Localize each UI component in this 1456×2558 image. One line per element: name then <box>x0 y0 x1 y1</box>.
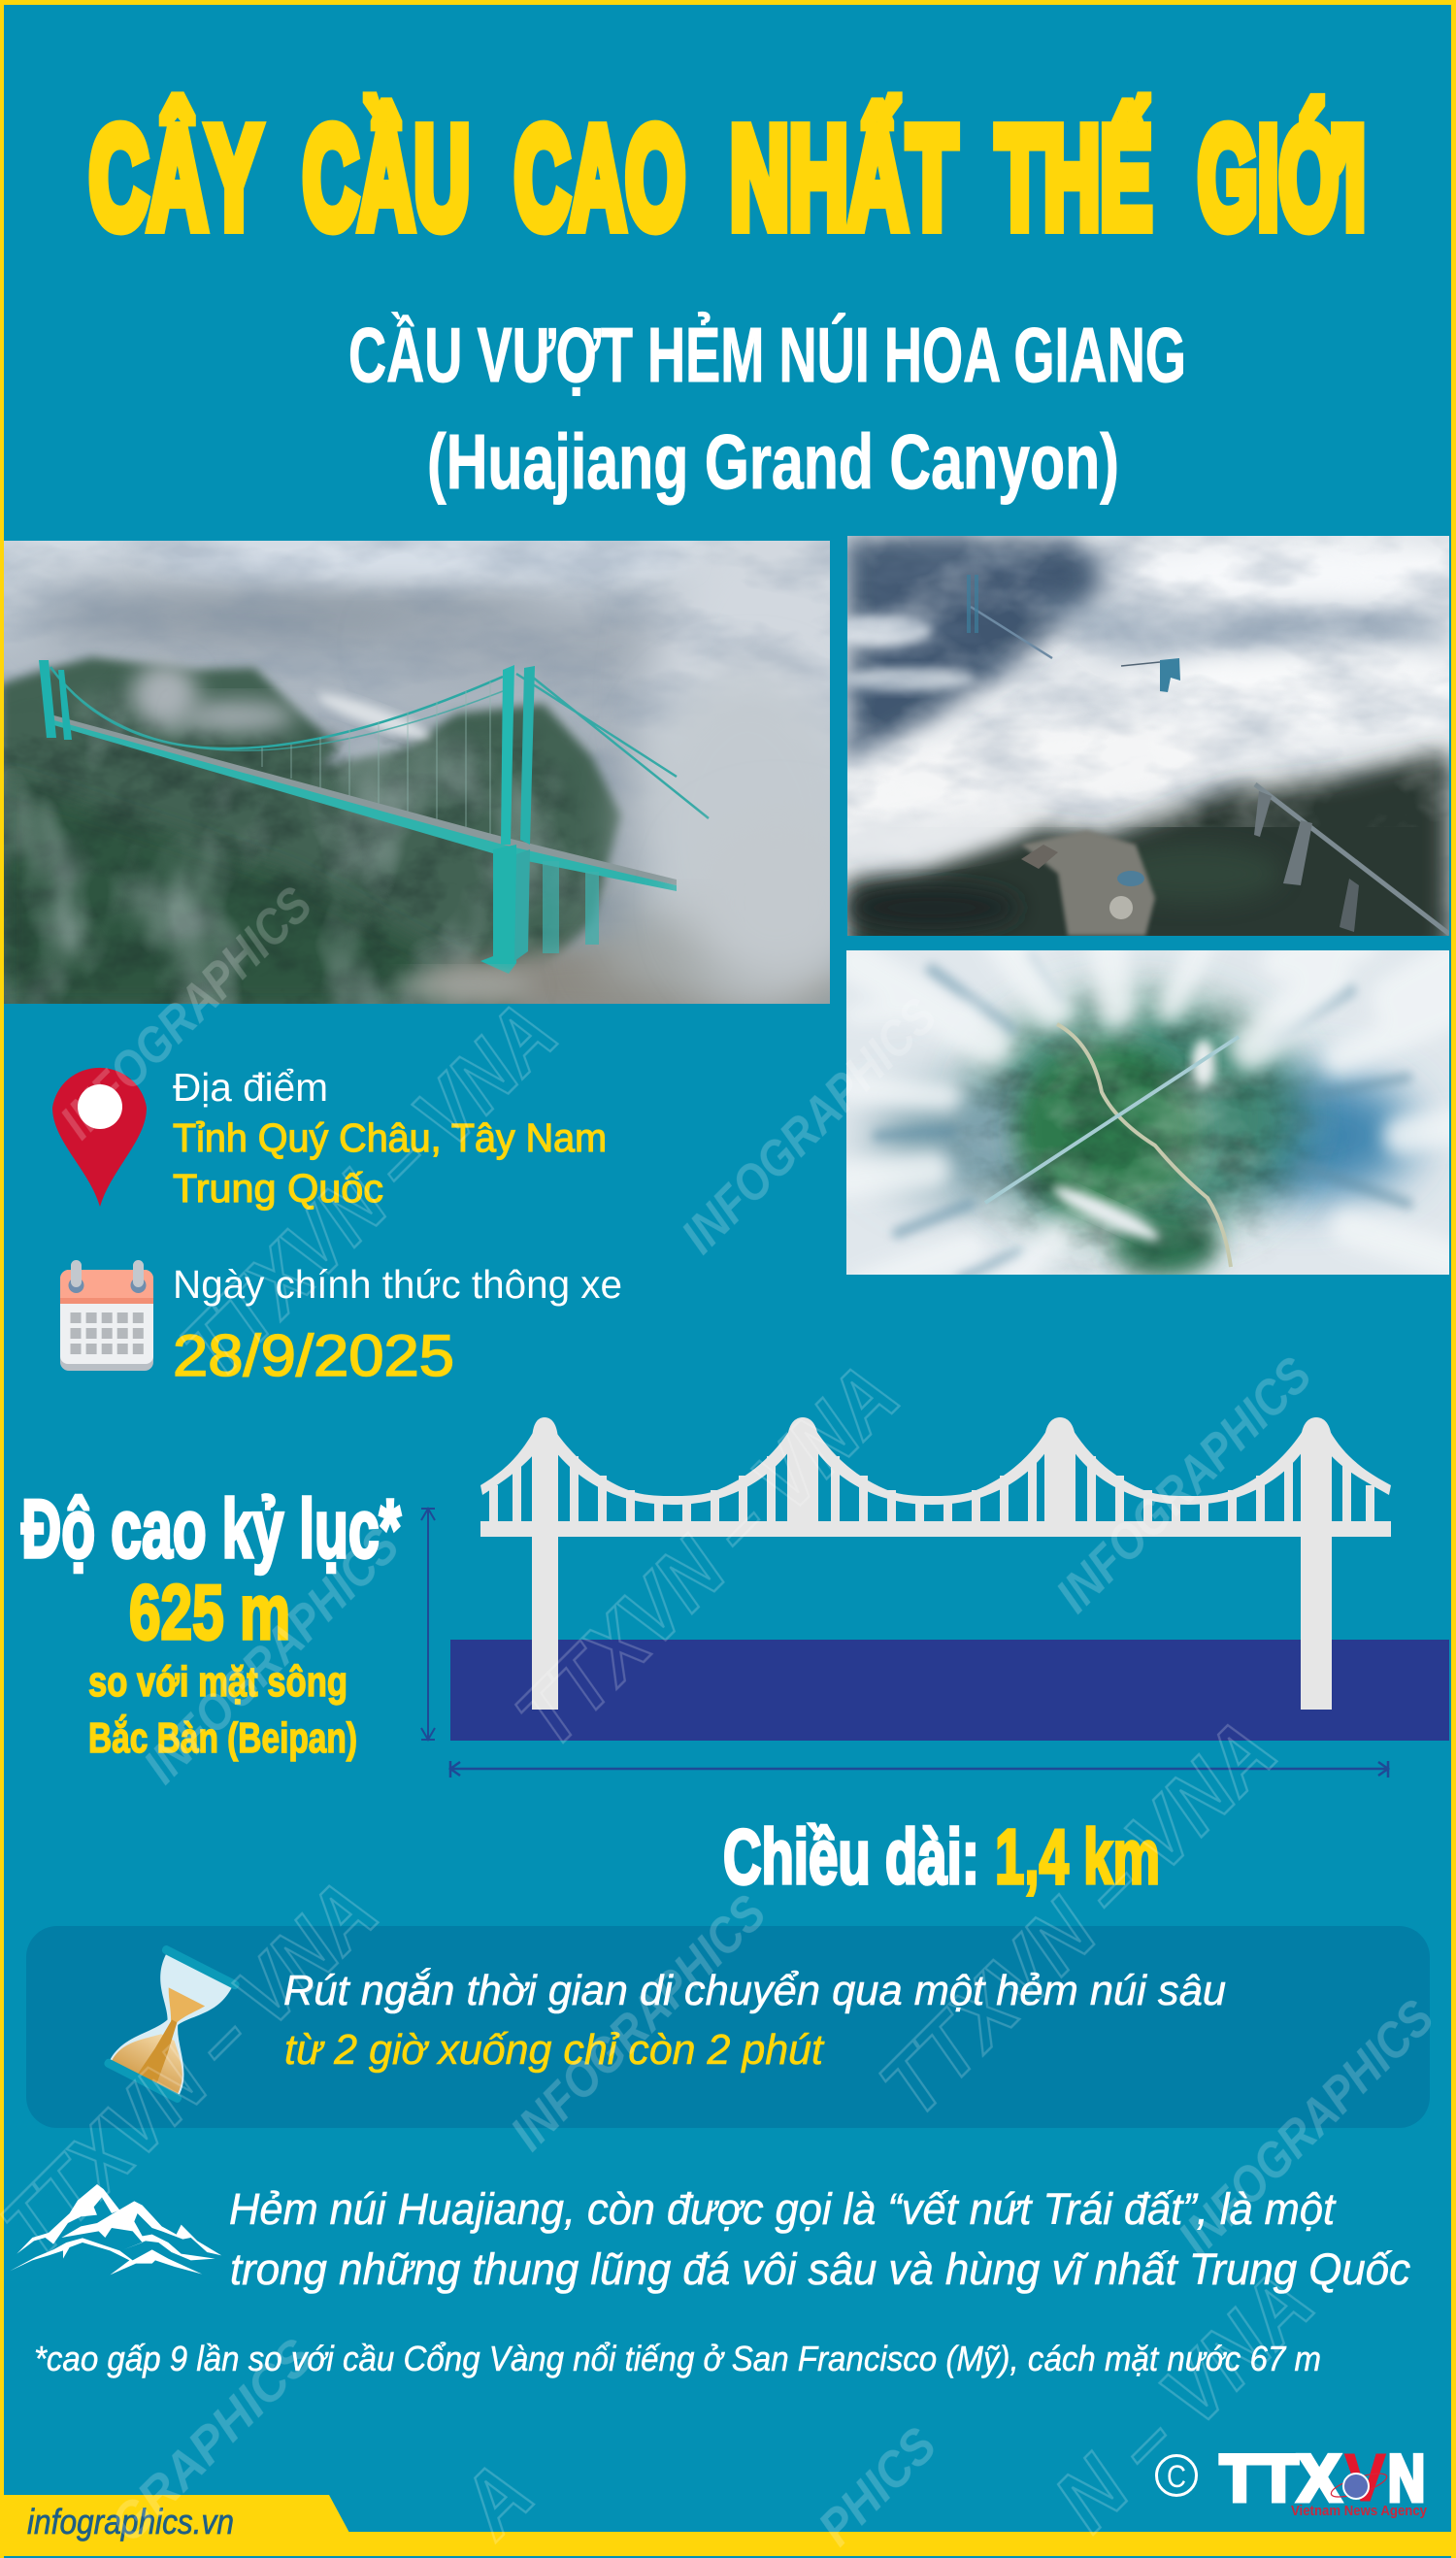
icon: mountains <box>10 2184 221 2275</box>
record height label: Độ cao kỷ lục* <box>21 1483 401 1576</box>
panel text: từ 2 giờ xuống chỉ còn 2 phút <box>284 2026 825 2074</box>
photo: sea of clouds with tower <box>847 536 1449 936</box>
logo: TTXVN: V <box>1344 2440 1386 2515</box>
icon: location pin <box>52 1068 147 1207</box>
panel: travel time <box>26 1926 1430 2128</box>
watermarks: A <box>441 2445 552 2556</box>
arrow: height <box>421 1509 435 1740</box>
description text <box>229 2184 1410 2294</box>
hangers <box>489 1456 1374 1524</box>
watermarks: N – VNA <box>1037 2254 1332 2549</box>
watermarks: TTXVN – VNA <box>163 985 576 1397</box>
length label: 1,4 km <box>995 1813 1160 1900</box>
watermarks: INFOGRAPHICS <box>133 1517 411 1794</box>
description text: Hẻm núi Huajiang, còn được gọi là “vết nứt Trái đất”, là một <box>229 2184 1337 2234</box>
location text: Địa điểm <box>173 1065 328 1110</box>
panel text: Rút ngắn thời gian di chuyển qua một hẻm núi sâu <box>283 1967 1226 2014</box>
title: CẦU <box>303 98 470 258</box>
theme park <box>1021 830 1155 936</box>
watermarks: INFOGRAPHICS <box>500 1884 778 2161</box>
footer tab <box>0 2495 349 2533</box>
towers <box>532 1417 558 1710</box>
cables <box>480 1431 1391 1505</box>
bridge in photo <box>39 660 709 974</box>
watermarks: TTXVN – VNA <box>498 1347 917 1766</box>
title <box>89 97 1366 258</box>
record height label: so với mặt sông <box>88 1658 347 1706</box>
arrow: length <box>450 1761 1388 1777</box>
far tower and viaduct <box>967 575 1449 934</box>
title: THẾ <box>996 97 1152 258</box>
logo: TTXVN: Vietnam News Agency <box>1291 2504 1427 2519</box>
title: CAO <box>514 98 685 258</box>
bridge diagram <box>480 1417 1391 1710</box>
deck <box>480 1521 1391 1537</box>
icon: calendar <box>60 1260 153 1371</box>
record height label: 625 m <box>129 1569 290 1655</box>
watermarks: INFOGRAPHICS <box>671 987 948 1264</box>
panel text <box>283 1967 1226 2074</box>
title: CÂY <box>89 98 261 258</box>
description text: trong những thung lũng đá vôi sâu và hùng vĩ nhất Trung Quốc <box>230 2244 1410 2294</box>
opening date text: 28/9/2025 <box>173 1323 454 1388</box>
watermarks: INFOGRAPHICS <box>50 877 323 1149</box>
record height label <box>21 1483 401 1762</box>
bridge line <box>985 1037 1239 1203</box>
subtitle <box>348 312 1186 505</box>
watermarks: GRAPHICS <box>99 2328 325 2553</box>
location text: Tỉnh Quý Châu, Tây Nam <box>173 1115 607 1160</box>
photo: aerial view with radial blur <box>846 950 1449 1275</box>
subtitle: (Huajiang Grand Canyon) <box>427 418 1119 505</box>
watermarks: TTXVN – VNA <box>862 1703 1295 2135</box>
location text <box>173 1065 607 1211</box>
logo: TTXVN: TTX <box>1220 2442 1340 2515</box>
icon: hourglass <box>103 1944 241 2104</box>
title: NHẤT <box>730 97 957 258</box>
logo: TTXVN: N <box>1388 2442 1425 2515</box>
length label: Chiều dài: <box>723 1813 979 1900</box>
logo: TTXVN: C <box>1167 2459 1186 2494</box>
watermarks: INFOGRAPHICS <box>1045 1346 1323 1623</box>
river band <box>450 1640 1449 1741</box>
opening date text <box>173 1262 622 1388</box>
website label: infographics.vn <box>27 2502 234 2541</box>
photo: suspension bridge in clouds <box>4 541 830 1004</box>
record height label: Bắc Bàn (Beipan) <box>88 1713 357 1762</box>
river <box>1057 1024 1231 1267</box>
watermarks: PHICS <box>808 2417 947 2556</box>
watermarks <box>0 877 1445 2556</box>
location text: Trung Quốc <box>173 1166 383 1211</box>
opening date text: Ngày chính thức thông xe <box>173 1262 622 1307</box>
footnote: *cao gấp 9 lần so với cầu Cổng Vàng nổi tiếng ở San Francisco (Mỹ), cách mặt nước 67 m <box>34 2339 1321 2378</box>
logo: TTXVN <box>1157 2440 1427 2519</box>
